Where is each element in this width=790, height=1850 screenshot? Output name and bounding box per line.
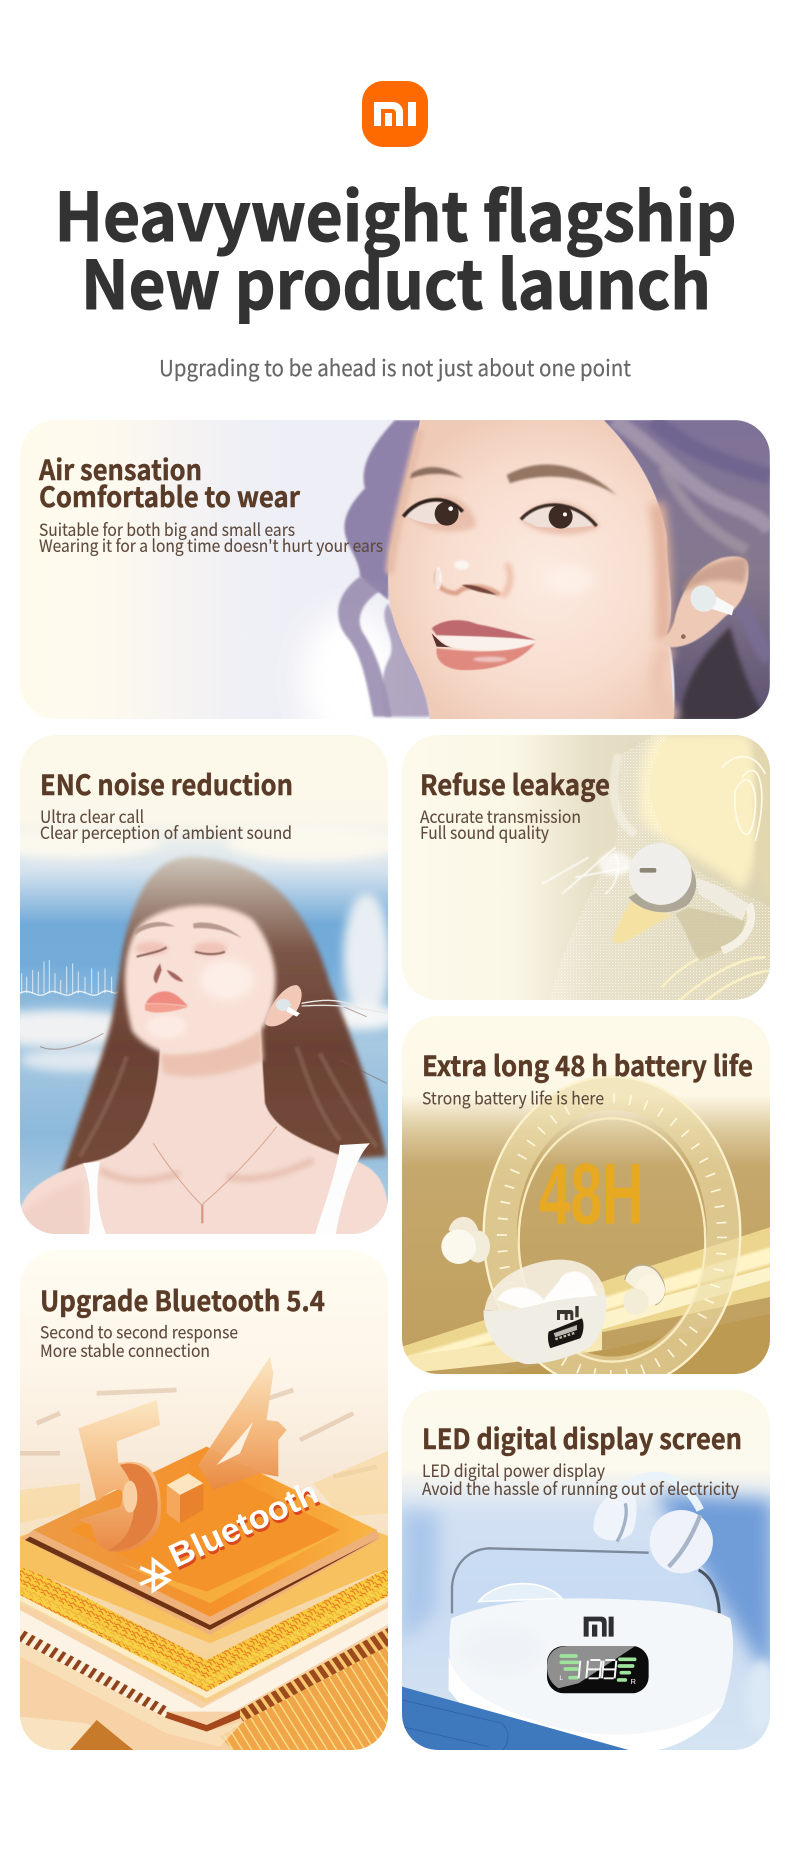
top plate xyxy=(22,1526,380,1635)
case lid xyxy=(452,1548,719,1617)
title: Heavyweight flagship xyxy=(54,164,736,261)
text: air sensation: Wearing it for a long time doesn't hurt your ears xyxy=(39,532,383,557)
text: refuse leakage: Full sound quality xyxy=(420,819,549,844)
text: ENC noise reduction: ENC noise reduction xyxy=(40,764,293,804)
Bluetooth lettering: Bluetooth xyxy=(164,1474,324,1575)
LED screen: R xyxy=(631,1677,636,1686)
text: Bluetooth: Upgrade Bluetooth 5.4 xyxy=(40,1280,325,1320)
text: refuse leakage xyxy=(420,772,610,843)
48H text: 48H xyxy=(539,1146,644,1242)
text: Bluetooth xyxy=(40,1280,325,1362)
left earbud xyxy=(441,1217,490,1264)
text: Bluetooth: Second to second response xyxy=(40,1318,238,1344)
text: battery life xyxy=(422,1053,752,1108)
panel: ENC noise reduction xyxy=(0,735,400,1240)
text: air sensation: Comfortable to wear xyxy=(39,476,301,516)
text: refuse leakage: Accurate transmission xyxy=(420,803,581,828)
LED screen: L xyxy=(559,1675,563,1682)
left eyebrow xyxy=(410,467,463,478)
eyes xyxy=(405,502,462,524)
ear and earbud xyxy=(662,556,748,647)
MI logo xyxy=(584,1617,614,1637)
title xyxy=(54,164,736,329)
LED screen xyxy=(547,1646,649,1693)
text: LED display: LED digital display screen xyxy=(422,1418,742,1458)
text: air sensation xyxy=(38,449,383,557)
number 5 xyxy=(78,1400,161,1552)
number 4 xyxy=(198,1357,287,1490)
text: battery life: Extra long 48 h battery life xyxy=(422,1045,753,1085)
ear and earbud xyxy=(265,985,302,1026)
text: air sensation: Air sensation xyxy=(38,449,202,489)
earbud with sound waves xyxy=(542,734,772,1004)
neck and chest xyxy=(20,1020,390,1240)
text: Bluetooth: More stable connection xyxy=(40,1337,210,1362)
panel: 48h battery life xyxy=(402,1016,772,1390)
photo: woman with closed eyes xyxy=(20,832,388,1234)
right eyebrow xyxy=(507,464,617,495)
bottom board xyxy=(20,1639,388,1750)
text: refuse leakage: Refuse leakage xyxy=(420,764,610,804)
panel: upgrade Bluetooth xyxy=(20,1250,390,1750)
chip illustration xyxy=(20,1357,390,1750)
waveform xyxy=(22,960,112,993)
Bluetooth lettering xyxy=(126,1474,328,1601)
text: air sensation: Suitable for both big and small ears xyxy=(39,516,295,541)
panel: refuse leakage xyxy=(402,734,772,1004)
left earbud xyxy=(594,1485,637,1542)
Bluetooth lettering: Bluetooth xyxy=(165,1477,326,1578)
panel: air sensation xyxy=(20,420,770,750)
title: New product launch xyxy=(81,232,711,329)
subtitle: Upgrading to be ahead is not just about one point xyxy=(159,351,631,383)
text: ENC noise reduction: Ultra clear call xyxy=(40,803,144,828)
photo: woman with purple hair xyxy=(338,420,770,720)
text: LED display xyxy=(422,1418,742,1500)
text: battery life: Strong battery life is here xyxy=(422,1084,604,1110)
decimal point xyxy=(167,1473,203,1523)
ring xyxy=(500,1093,724,1373)
tank top and necklace xyxy=(83,1162,106,1234)
text: ENC noise reduction: Clear perception of ambient sound xyxy=(40,819,292,844)
lips xyxy=(146,991,188,1006)
case body xyxy=(449,1598,733,1753)
gold light beam xyxy=(402,1227,772,1374)
brows and eyes xyxy=(135,922,242,938)
text: LED display: Avoid the hassle of running out of electricity xyxy=(422,1475,739,1500)
blue device xyxy=(402,1687,629,1757)
right earbud xyxy=(623,1265,665,1315)
nose xyxy=(154,963,183,983)
face xyxy=(125,905,276,1054)
panel: LED display xyxy=(402,1390,779,1757)
blue background glows xyxy=(655,1493,772,1683)
text: ENC noise reduction xyxy=(40,772,292,843)
right earbud xyxy=(622,1476,713,1573)
yellow fan xyxy=(612,901,672,943)
textured layers xyxy=(20,1563,390,1693)
charging case xyxy=(484,1260,606,1364)
nose xyxy=(437,570,500,595)
logo: Xiaomi MI badge xyxy=(362,81,428,147)
text: LED display: LED digital power display xyxy=(422,1457,605,1482)
lips xyxy=(432,620,537,641)
